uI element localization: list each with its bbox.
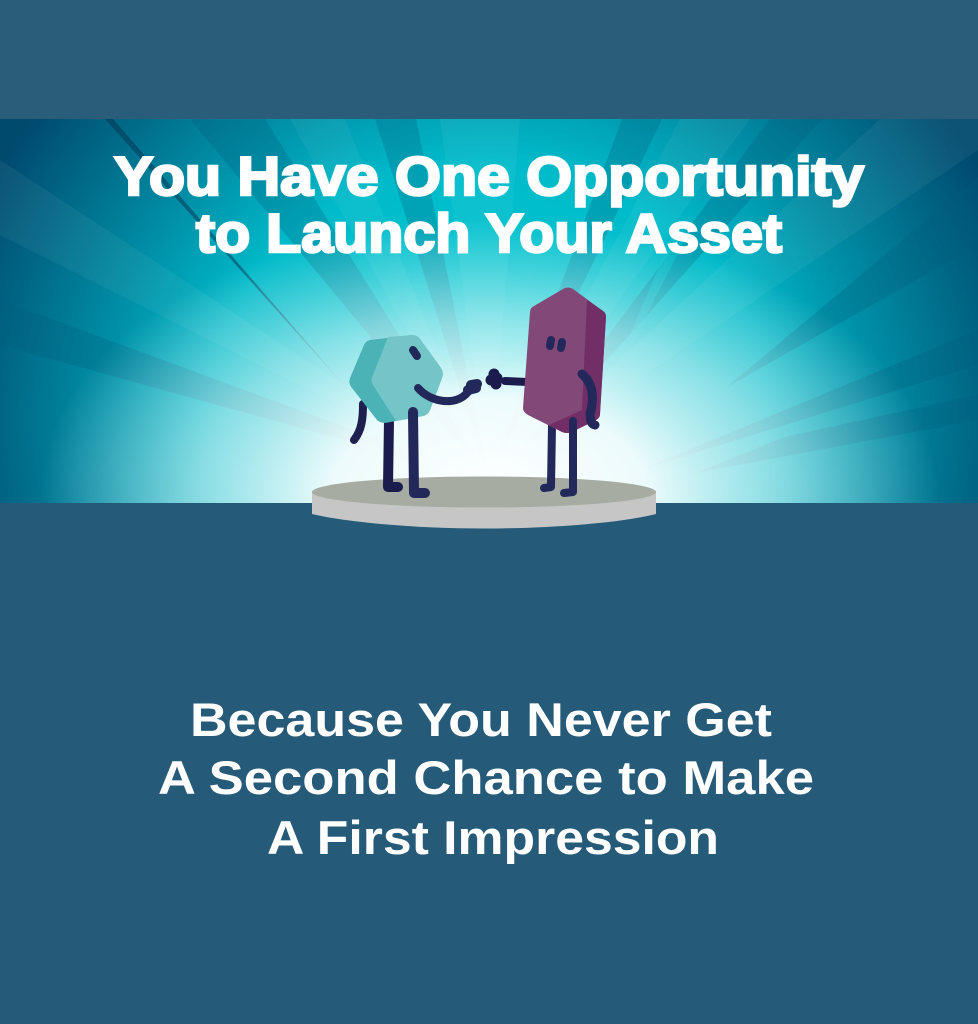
subtitle [158,693,814,864]
subtitle: Because You Never Get [190,693,772,746]
front arm [418,388,468,401]
back leg [388,420,398,487]
fist [491,374,497,384]
side arm [582,374,595,425]
title: You Have One Opportunity [114,145,864,207]
top band [0,0,978,119]
character: teal hexagon [349,335,477,493]
fist [468,384,477,390]
panel: sunburst banner [0,119,978,503]
crystal body [523,288,606,433]
subtitle: A Second Chance to Make [158,751,814,804]
hexagon body [349,335,443,423]
subtitle: A First Impression [267,811,719,864]
title: to Launch Your Asset [196,202,782,264]
eyes [550,340,562,348]
title [114,145,864,264]
reaching arm [505,381,528,382]
back arm [354,404,363,440]
infographic canvas [0,119,978,864]
character: purple crystal [491,288,606,493]
back leg [544,425,552,488]
front leg [413,412,425,493]
platform [312,476,656,528]
front leg [564,421,573,493]
eye [413,350,417,356]
